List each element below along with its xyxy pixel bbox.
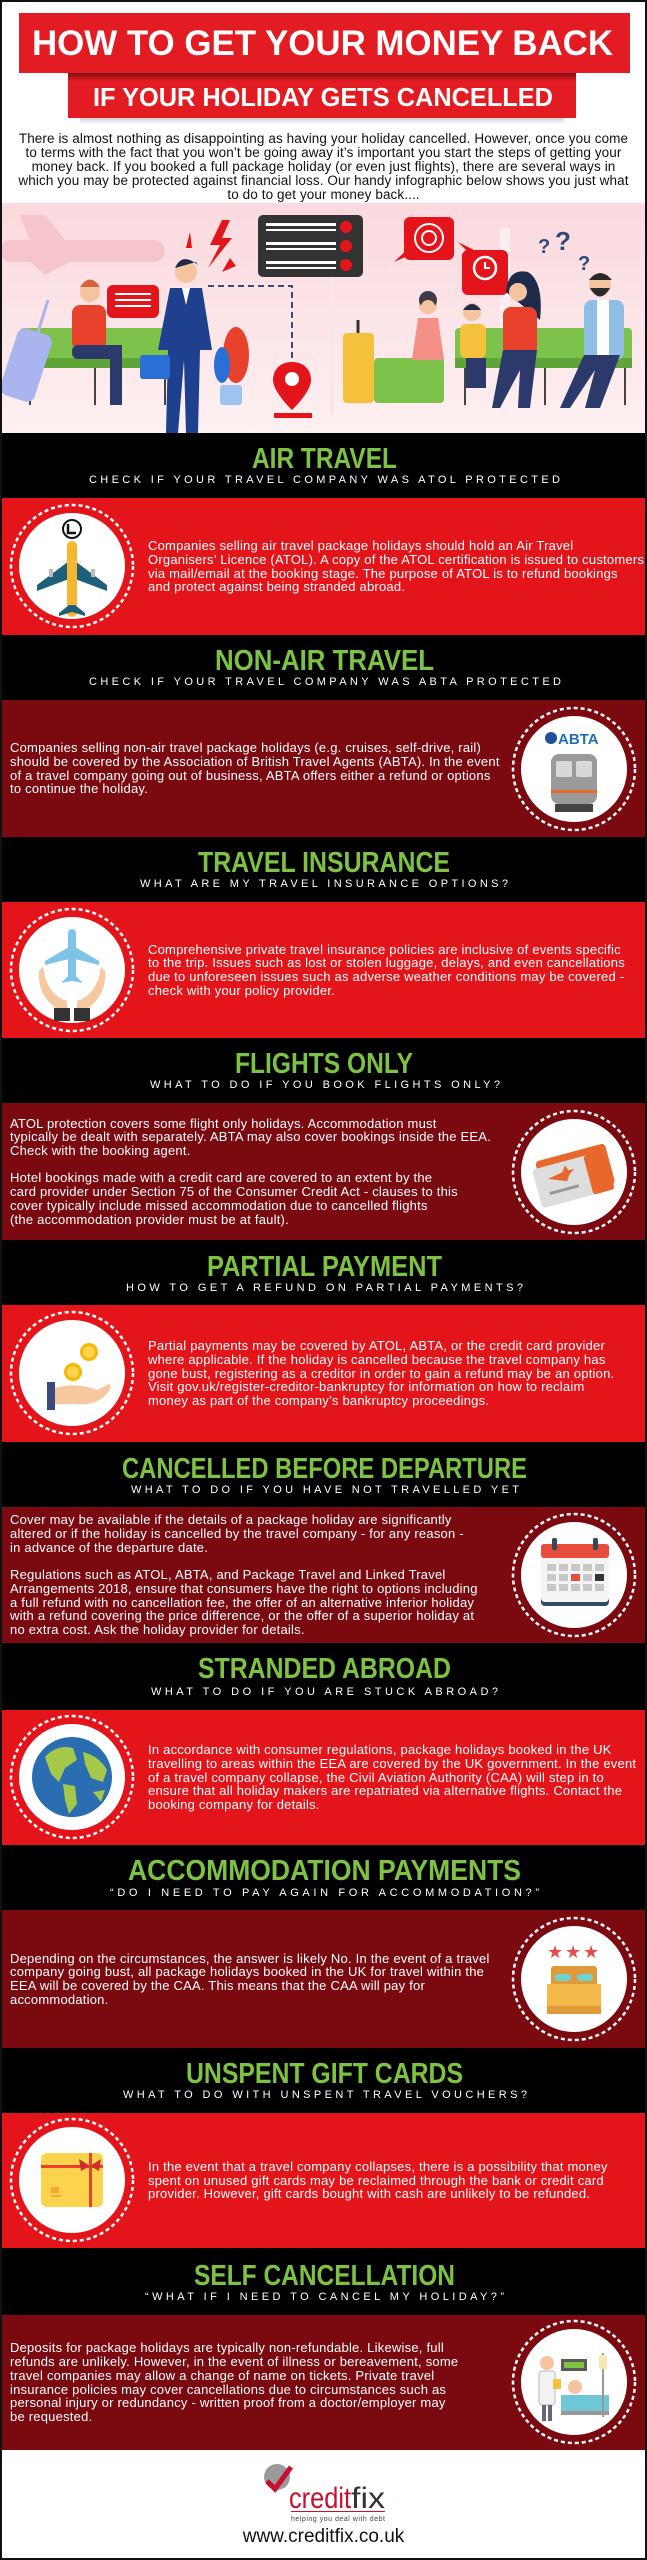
icon: bed with stars: ★ — [583, 1942, 599, 1963]
icon: airplane with ATOL badge — [10, 504, 134, 628]
panel: self cancellation — [2, 2315, 645, 2450]
text: non-air travel: Companies selling non-air travel package holidays (e.g. cruises, self-drive, rail) — [10, 740, 481, 755]
text: cancelled before departure: in advance of the departure date. — [10, 1540, 208, 1555]
text: air travel: via mail/email at the booking stage. The purpose of ATOL is to refund bookings — [148, 566, 618, 580]
text: travel insurance — [148, 942, 625, 998]
question marks: ? — [555, 226, 571, 256]
text: partial payment: Visit gov.uk/register-creditor-bankruptcy for information on how to reclaim — [148, 1379, 585, 1394]
section heading: partial payment — [126, 1251, 523, 1294]
text: air travel: Companies selling air travel package holidays should hold an Air Travel — [148, 538, 573, 553]
logo: creditfix: fix — [351, 2482, 385, 2515]
section heading: stranded abroad — [151, 1653, 498, 1698]
icon: plane tickets — [512, 1110, 636, 1234]
text: stranded abroad — [148, 1742, 636, 1812]
text: self cancellation: refunds are unlikely. However, in the event of illness or bereavement, some — [10, 2354, 458, 2369]
text: flights only: (the accommodation provider must be at fault). — [10, 1212, 289, 1227]
intro text — [18, 131, 629, 202]
section heading: unspent gift cards — [123, 2058, 527, 2101]
panel: stranded abroad — [2, 1710, 645, 1845]
icon: ABTA train: ABTA — [558, 731, 599, 748]
seats — [20, 328, 632, 368]
text: air travel: and protect against being stranded abroad. — [148, 579, 405, 594]
footer — [0, 2450, 647, 2560]
logo: creditfix — [264, 2464, 385, 2523]
section heading: partial payment: HOW TO GET A REFUND ON PARTIAL PAYMENTS? — [126, 1282, 523, 1294]
section heading: non-air travel: CHECK IF YOUR TRAVEL COMPANY WAS ABTA PROTECTED — [89, 676, 561, 688]
section heading: unspent gift cards: UNSPENT GIFT CARDS — [186, 2058, 463, 2090]
section heading: travel insurance: TRAVEL INSURANCE — [198, 847, 450, 879]
section heading: unspent gift cards: WHAT TO DO WITH UNSPENT TRAVEL VOUCHERS? — [123, 2089, 527, 2101]
text: cancelled before departure: Cover may be available if the details of a package holiday are significantly — [10, 1512, 452, 1527]
panel: unspent gift cards — [2, 2113, 645, 2248]
panel: accommodation payments — [2, 1910, 645, 2048]
text: flights only: card provider under Section 75 of the Consumer Credit Act - clauses to this — [10, 1184, 458, 1199]
text: flights only: ATOL protection covers some flight only holidays. Accommodation must — [10, 1116, 437, 1131]
title banners: HOW TO GET YOUR MONEY BACK — [32, 24, 613, 63]
section heading: self cancellation: “WHAT IF I NEED TO CANCEL MY HOLIDAY?” — [145, 2291, 504, 2303]
illustration: airport waiting scene — [2, 203, 645, 433]
text: stranded abroad: ensure that all holiday makers are repatriated via alternative flights. Contact the — [148, 1783, 622, 1798]
panel: air travel — [2, 498, 645, 635]
text: partial payment — [148, 1338, 614, 1408]
plant — [214, 327, 249, 405]
text: cancelled before departure: Arrangements 2018, ensure that consumers have the right to options including — [10, 1581, 478, 1596]
text: self cancellation: be requested. — [10, 2409, 92, 2424]
icon: calendar — [512, 1512, 636, 1638]
question marks: ? — [578, 253, 590, 275]
girl — [412, 291, 444, 360]
logo: creditfix: credit — [289, 2482, 352, 2515]
text: stranded abroad: In accordance with consumer regulations, package holidays booked in the UK — [148, 1742, 612, 1757]
section heading: flights only: WHAT TO DO IF YOU BOOK FLIGHTS ONLY? — [150, 1079, 500, 1091]
text: cancelled before departure — [10, 1512, 478, 1637]
section heading: stranded abroad: WHAT TO DO IF YOU ARE STUCK ABROAD? — [151, 1686, 498, 1698]
section heading: flights only — [150, 1048, 500, 1091]
section heading: accommodation payments: “DO I NEED TO PAY AGAIN FOR ACCOMMODATION?” — [110, 1887, 539, 1899]
icon: hands holding plane — [10, 908, 134, 1032]
icon: hand with coins — [10, 1310, 134, 1436]
seated woman left — [72, 280, 122, 405]
text: non-air travel: should be covered by the Association of British Travel Agents (ABTA). In the event — [10, 754, 500, 769]
section heading: flights only: FLIGHTS ONLY — [235, 1048, 413, 1080]
suitcase lavender — [0, 300, 54, 404]
suitcases — [343, 320, 444, 403]
text: accommodation payments — [10, 1951, 490, 2007]
text: unspent gift cards: In the event that a travel company collapses, there is a possibility that money — [148, 2159, 608, 2174]
panel: non-air travel — [2, 700, 645, 837]
text: flights only: Hotel bookings made with a credit card are covered to an extent by the — [10, 1170, 432, 1185]
icon: globe — [10, 1714, 134, 1840]
businessman — [140, 259, 212, 433]
text: self cancellation: travel companies may allow a change of name on tickets. Private travel — [10, 2368, 434, 2383]
question marks: ? — [538, 236, 550, 258]
text: self cancellation: insurance policies may cover cancellations due to circumstances such as — [10, 2382, 446, 2396]
text: travel insurance: to the trip. Issues such as lost or stolen luggage, delays, and even cancellations — [148, 955, 625, 970]
speech bubble — [107, 285, 159, 318]
section heading: accommodation payments: ACCOMMODATION PAYMENTS — [128, 1855, 521, 1887]
text: self cancellation: personal injury or redundancy - written proof from a doctor/employer may — [10, 2395, 446, 2410]
panel: cancelled before departure — [2, 1507, 645, 1643]
text: stranded abroad: of a travel company collapse, the Civil Aviation Authority (CAA) will step in to — [148, 1770, 604, 1785]
text: flights only: Check with the booking agent. — [10, 1143, 191, 1158]
text: travel insurance: Comprehensive private travel insurance policies are inclusive of events specific — [148, 942, 621, 957]
intro text: to do to get your money back.... — [227, 187, 420, 202]
icon: bed with stars: ★ — [547, 1942, 563, 1963]
intro text: There is almost nothing as disappointing as having your holiday cancelled. However, once you come — [19, 131, 628, 146]
header white area — [0, 0, 647, 203]
text: travel insurance: due to unforeseen issues such as adverse weather conditions may be covered - — [148, 969, 624, 984]
icon: ABTA train — [512, 706, 636, 832]
text: partial payment: money as part of the company’s bankruptcy proceedings. — [148, 1393, 489, 1408]
section heading: stranded abroad: STRANDED ABROAD — [198, 1653, 451, 1685]
text: partial payment: Partial payments may be covered by ATOL, ABTA, or the credit card provider — [148, 1338, 605, 1353]
text: cancelled before departure: altered or if the holiday is cancelled by the travel company - for any reason - — [10, 1526, 464, 1541]
text: unspent gift cards: spent on unused gift cards may be reclaimed through the bank or credit card — [148, 2173, 604, 2188]
lightning — [186, 220, 236, 272]
logo: creditfix: helping you deal with debt — [291, 2516, 385, 2523]
section heading: cancelled before departure — [122, 1453, 527, 1496]
text: non-air travel: to continue the holiday. — [10, 781, 148, 796]
title banners — [19, 13, 630, 123]
text: non-air travel: of a travel company going out of business, ABTA offers either a refund or options — [10, 768, 491, 782]
intro text: money back. If you booked a full package holiday (or even just flights), there are several ways in — [32, 159, 615, 174]
text: flights only — [10, 1116, 491, 1227]
icon: gift card — [10, 2118, 134, 2242]
text: cancelled before departure: a full refund with no cancellation fee, the offer of an alternative inferior holiday — [10, 1595, 474, 1610]
section heading: air travel: AIR TRAVEL — [252, 443, 397, 475]
bearded man — [560, 273, 624, 408]
section heading: cancelled before departure: CANCELLED BEFORE DEPARTURE — [122, 1453, 527, 1485]
section heading: non-air travel: NON-AIR TRAVEL — [215, 645, 434, 677]
text: self cancellation: Deposits for package holidays are typically non-refundable. Likewise, full — [10, 2340, 444, 2355]
text: accommodation payments: accommodation. — [10, 1992, 108, 2007]
boy — [460, 303, 486, 388]
panel: travel insurance — [2, 902, 645, 1038]
text: accommodation payments: Depending on the circumstances, the answer is likely No. In the event of a travel — [10, 1951, 490, 1966]
text: cancelled before departure: with a refund covering the price difference, or the offer of a superior holiday at — [10, 1608, 474, 1623]
location pin — [273, 362, 312, 418]
section heading: travel insurance: WHAT ARE MY TRAVEL INSURANCE OPTIONS? — [140, 878, 508, 890]
section heading: partial payment: PARTIAL PAYMENT — [207, 1251, 442, 1283]
section heading: non-air travel — [89, 645, 561, 688]
text: accommodation payments: company going bust, all package holidays booked in the UK for travel within the — [10, 1964, 484, 1979]
text: stranded abroad: travelling to areas within the EEA are covered by the UK government. In the event — [148, 1756, 636, 1771]
checklist board — [258, 215, 363, 277]
icon: doctor and patient — [512, 2320, 636, 2444]
text: cancelled before departure: no extra cost. Ask the holiday provider for details. — [10, 1622, 305, 1637]
text: air travel — [148, 538, 644, 594]
section heading: self cancellation: SELF CANCELLATION — [194, 2260, 455, 2292]
section heading: accommodation payments — [110, 1855, 539, 1899]
section heading: cancelled before departure: WHAT TO DO IF YOU HAVE NOT TRAVELLED YET — [131, 1484, 519, 1496]
title banners: IF YOUR HOLIDAY GETS CANCELLED — [93, 82, 553, 112]
intro text: to terms with the fact that you won’t be going away it’s important you start the steps of getting your — [25, 145, 622, 160]
intro text: which you may be protected against financial loss. Our handy infographic below shows you just what — [18, 173, 629, 188]
gear and clock bubbles — [394, 217, 508, 295]
plane silhouette — [0, 215, 165, 275]
text: non-air travel — [10, 740, 500, 796]
dashed path — [208, 286, 292, 358]
icon: bed with stars: ★ — [565, 1942, 581, 1963]
section heading: air travel — [89, 443, 560, 486]
text: unspent gift cards — [148, 2159, 608, 2201]
text: cancelled before departure: Regulations such as ATOL, ABTA, and Package Travel and Linked Travel — [10, 1567, 446, 1582]
section heading: air travel: CHECK IF YOUR TRAVEL COMPANY WAS ATOL PROTECTED — [89, 474, 560, 486]
text: accommodation payments: EEA will be covered by the CAA. This means that the CAA will pay for — [10, 1978, 425, 1993]
text: unspent gift cards: provider. However, gift cards bought with cash are unlikely to be refunded. — [148, 2186, 590, 2201]
text: self cancellation — [10, 2340, 458, 2424]
text: air travel: Organisers’ Licence (ATOL). A copy of the ATOL certification is issued to customers — [148, 552, 644, 567]
website url: www.creditfix.co.uk — [243, 2526, 404, 2547]
text: partial payment: gone bust, registering as a creditor in order to gain a refund may be an option. — [148, 1366, 614, 1381]
section heading: self cancellation — [145, 2260, 504, 2303]
icon: bed with stars — [512, 1916, 636, 2042]
text: flights only: cover typically include missed accommodation due to cancelled flights — [10, 1198, 428, 1213]
text: travel insurance: check with your policy provider. — [148, 983, 335, 998]
section heading: travel insurance — [140, 847, 508, 890]
text: flights only: typically be dealt with separately. ABTA may also cover bookings inside the EEA. — [10, 1129, 491, 1144]
text: partial payment: where applicable. If the holiday is cancelled because the travel company has — [148, 1352, 606, 1367]
text: stranded abroad: booking company for details. — [148, 1797, 320, 1812]
woman right — [492, 271, 541, 408]
question marks — [538, 226, 590, 275]
panel: flights only — [2, 1103, 645, 1240]
panel: partial payment — [2, 1305, 645, 1442]
